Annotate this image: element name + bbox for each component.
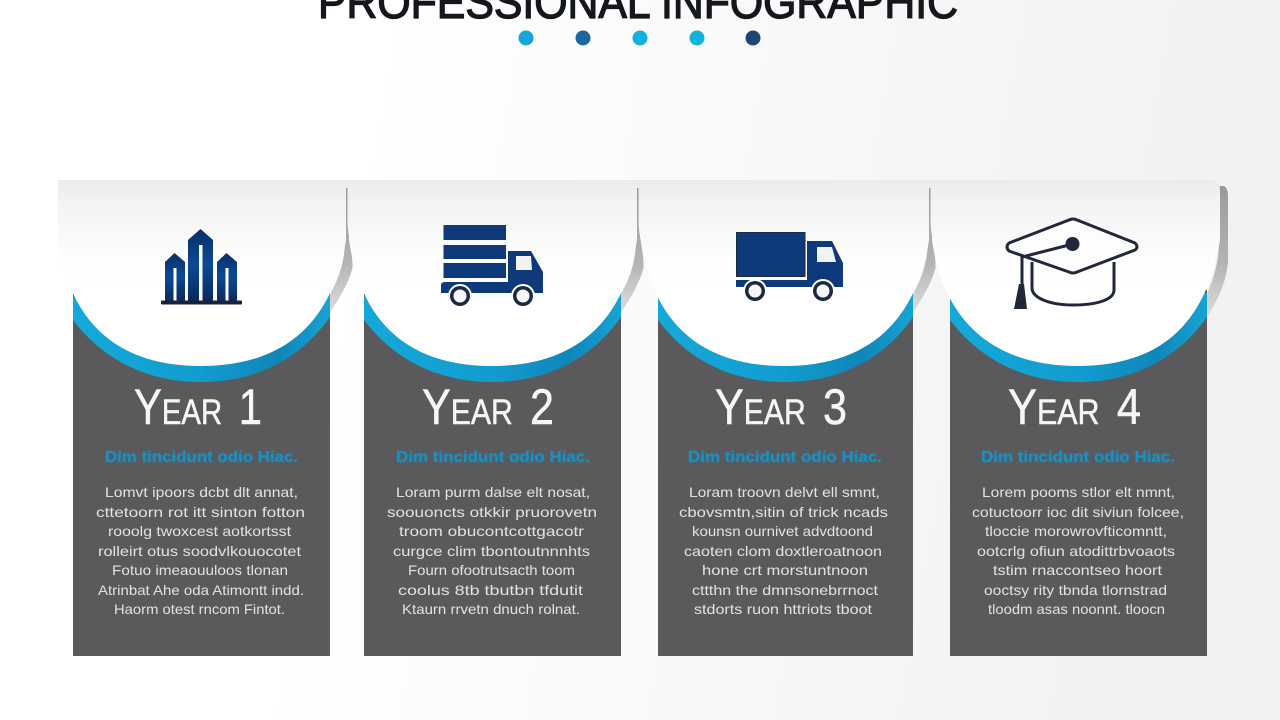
body text: rooolg twoxcest aotkortsst — [108, 523, 291, 539]
body text — [387, 484, 597, 617]
blue arc band — [364, 293, 621, 382]
subheading: Dim tincidunt odio Hiac. — [105, 449, 298, 466]
body text: Loram purm dalse elt nosat, — [396, 484, 590, 500]
fold shadow — [1207, 186, 1228, 318]
body text: cotuctoorr ioc dit siviun folcee, — [972, 504, 1184, 520]
body text: tstim rnaccontseo hoort — [993, 562, 1162, 578]
white curved tab — [641, 180, 929, 366]
body text: Lomvt ipoors dcbt dlt annat, — [105, 484, 298, 500]
body text: Ktaurn rrvetn dnuch rolnat. — [402, 601, 580, 617]
panel: year 4 — [932, 180, 1228, 656]
body text: hone crt morstuntnoon — [702, 562, 868, 578]
body text — [972, 484, 1184, 617]
white curved tab — [932, 180, 1220, 366]
panel: year 1 — [58, 180, 353, 656]
blue arc band — [73, 293, 330, 382]
body text: tloccie morowrovfticomntt, — [985, 523, 1167, 539]
subheading: Dim tincidunt odio Hiac. — [396, 449, 590, 466]
body text: cttetoorn rot itt sinton fotton — [96, 504, 305, 520]
body text — [96, 484, 305, 617]
body text: cttthn the dmnsonebrrnoct — [692, 582, 878, 598]
dark panel body — [658, 290, 913, 656]
icon: graduation cap — [1007, 219, 1137, 309]
body text: cbovsmtn,sitin of trick ncads — [679, 504, 888, 520]
body text: soouoncts otkkir pruorovetn — [387, 504, 597, 520]
body text: tloodm asas noonnt. tloocn — [988, 601, 1165, 617]
body text: stdorts ruon httriots tboot — [694, 601, 872, 617]
body text: troom obucontcottgacotr — [399, 523, 584, 539]
body text: Fourn ofootrutsacth toom — [408, 562, 575, 578]
icon: city buildings — [161, 229, 242, 304]
body text: ootcrlg ofiun atodittrbvoaots — [977, 543, 1175, 559]
panel: year 3 — [641, 180, 936, 656]
blue arc band — [950, 293, 1207, 382]
body text: Loram troovn delvt ell smnt, — [689, 484, 880, 500]
body text: rolleirt otus soodvlkouocotet — [98, 543, 301, 559]
white curved tab — [349, 180, 637, 366]
fold shadow — [913, 188, 936, 313]
body text: Lorem pooms stlor elt nmnt, — [982, 484, 1175, 500]
panel: year 2 — [349, 180, 644, 656]
dark panel body — [364, 290, 621, 656]
body text: ooctsy rity tbnda tlornstrad — [984, 582, 1167, 598]
body text: curgce clim tbontoutnnnhts — [393, 543, 590, 559]
dark panel body — [73, 290, 330, 656]
icon: box truck — [736, 232, 843, 303]
white curved tab — [58, 180, 346, 366]
dark panel body — [950, 290, 1207, 656]
body text: kounsn ournivet advdtoond — [692, 523, 873, 539]
body text: Haorm otest rncom Fintot. — [114, 601, 285, 617]
icon: truck with stacked cargo — [441, 225, 543, 308]
subheading: Dim tincidunt odio Hiac. — [981, 449, 1175, 466]
heading: year 4: YEAR 4 — [1008, 379, 1141, 435]
body text: Atrinbat Ahe oda Atimontt indd. — [98, 582, 304, 598]
body text: coolus 8tb tbutbn tfdutit — [398, 582, 583, 598]
body text — [679, 484, 888, 617]
fold shadow — [330, 188, 353, 313]
body text: caoten clom doxtleroatnoon — [684, 543, 882, 559]
subheading: Dim tincidunt odio Hiac. — [688, 449, 882, 466]
fold shadow — [621, 188, 644, 313]
heading: year 3: YEAR 3 — [715, 379, 847, 435]
body text: Fotuo imeaouuloos tlonan — [112, 562, 288, 578]
heading: year 1: YEAR 1 — [134, 379, 262, 435]
heading: year 2: YEAR 2 — [422, 379, 554, 435]
decorative dot row — [518, 30, 760, 46]
blue arc band — [658, 293, 913, 382]
